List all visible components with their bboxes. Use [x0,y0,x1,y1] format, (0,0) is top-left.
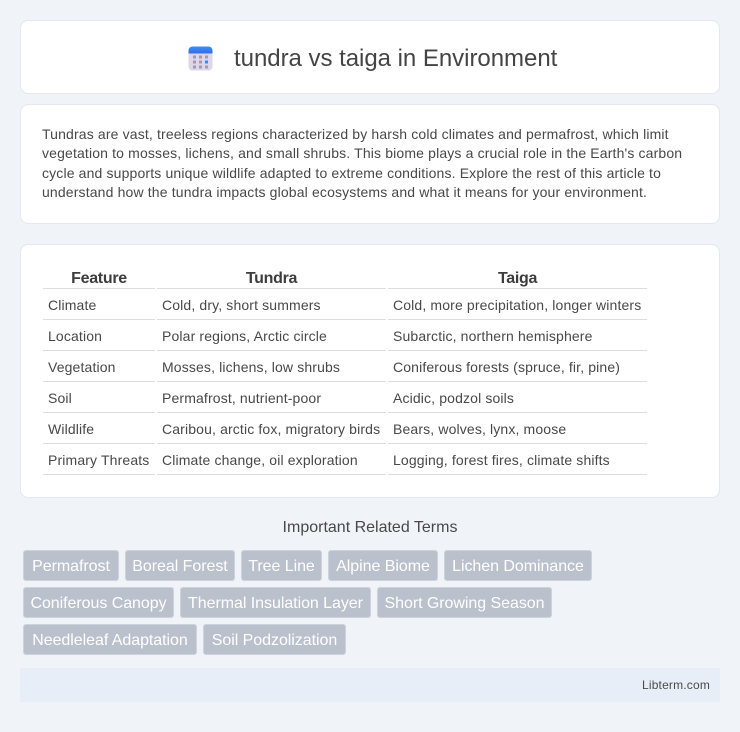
title: tundra vs taiga in Environment [234,45,557,72]
row: vegetation: Coniferous forests (spruce, fir, pine) [393,359,620,375]
row: vegetation [48,359,620,375]
intro paragraph: Tundras are vast, treeless regions characterized by harsh cold climates and permafrost, which limit [42,126,669,142]
row: climate: Cold, dry, short summers [162,297,321,313]
row: location: Subarctic, northern hemisphere [393,328,593,344]
table header row [71,270,538,287]
row: vegetation: Vegetation [48,359,116,375]
tag group: related terms: Tree Line [248,558,315,575]
row: primary threats: Climate change, oil exploration [162,452,358,468]
intro paragraph: cycle and supports unique wildlife adapted to extreme conditions. Explore the rest of this article to [42,165,661,181]
tag group: related terms: Permafrost [32,558,110,575]
row: climate [48,297,641,313]
panel: intro text [20,104,720,224]
panel: comparison table [20,244,720,498]
row: location: Location [48,328,102,344]
row: primary threats [48,452,610,468]
table header row: Feature [71,270,127,287]
tag group: related terms [23,550,592,655]
row: soil: Permafrost, nutrient-poor [162,390,321,406]
row: wildlife: Wildlife [48,421,94,437]
intro paragraph: vegetation to mosses, lichens, and small shrubs. This biome plays a crucial role in the Earth's carbon [42,145,682,161]
row: primary threats: Primary Threats [48,452,149,468]
row: location: Polar regions, Arctic circle [162,328,327,344]
heading: related terms: Important Related Terms [283,519,457,536]
tag group: related terms: Coniferous Canopy [30,595,167,612]
row: soil: Soil [48,390,72,406]
row: climate: Climate [48,297,96,313]
row: wildlife [48,421,566,437]
row: wildlife: Caribou, arctic fox, migratory birds [162,421,380,437]
tag group: related terms: Soil Podzolization [212,632,337,649]
tag group: related terms: Alpine Biome [336,558,430,575]
tag group: related terms: Boreal Forest [132,558,228,575]
row: wildlife: Bears, wolves, lynx, moose [393,421,566,437]
tag group: related terms: Short Growing Season [384,595,544,612]
intro paragraph [42,126,682,200]
intro paragraph: understand how the tundra impacts global ecosystems and what it means for your environment. [42,184,647,200]
row: vegetation: Mosses, lichens, low shrubs [162,359,340,375]
row: climate: Cold, more precipitation, longer winters [393,297,641,313]
panel: header [20,20,720,94]
row: soil [48,390,514,406]
row: location [48,328,593,344]
table header row: Tundra [246,270,297,287]
icon: calendar [188,46,212,70]
table header row: Taiga [498,270,537,287]
tag group: related terms: Lichen Dominance [452,558,584,575]
tag group: related terms: Thermal Insulation Layer [188,595,363,612]
tag group: related terms: Needleleaf Adaptation [32,632,188,649]
footer [20,668,720,702]
footer credit: Libterm.com [642,678,710,692]
row: primary threats: Logging, forest fires, climate shifts [393,452,610,468]
row: soil: Acidic, podzol soils [393,390,514,406]
